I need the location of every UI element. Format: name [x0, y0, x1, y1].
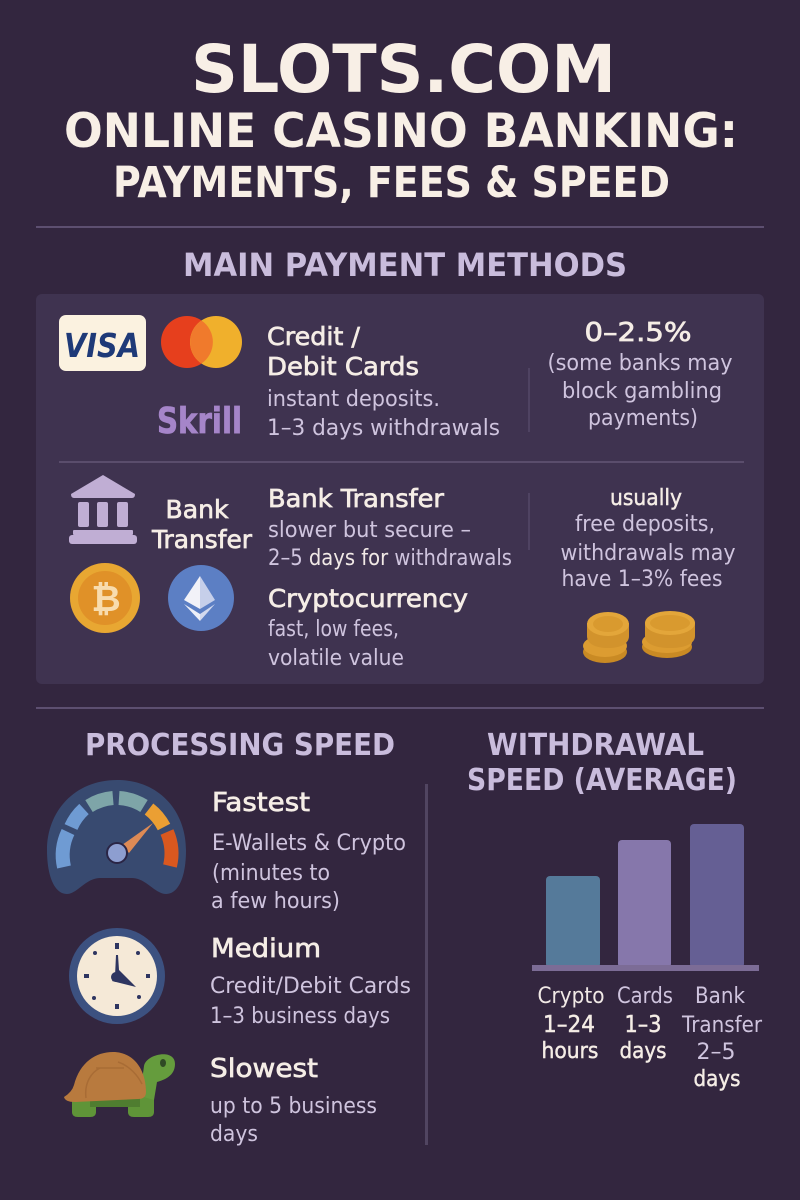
text: credit and debit cards: 1–3 days withdrawals — [267, 416, 500, 441]
icon: coins — [583, 611, 695, 663]
text: fastest — [211, 788, 406, 914]
icon: speedometer — [47, 780, 186, 894]
text: fastest: Fastest — [212, 788, 310, 818]
text: medium: Credit/Debit Cards — [210, 974, 411, 999]
icon: visa: VISA — [64, 326, 140, 365]
text: bank and crypto fees: have 1–3% fees — [562, 567, 722, 592]
heading: withdrawal speed: WITHDRAWAL — [487, 728, 704, 763]
text: slowest: up to 5 business — [210, 1094, 377, 1119]
icon: turtle — [64, 1052, 175, 1117]
bar chart: withdrawal speed — [532, 824, 763, 1092]
icon: skrill: Skrill — [157, 401, 242, 442]
text: bank and crypto fees — [560, 486, 736, 592]
text: slowest: days — [210, 1122, 258, 1147]
text: medium: 1–3 business days — [210, 1004, 390, 1029]
labels: bank transfer: 2–5 — [696, 1040, 736, 1065]
text: cryptocurrency: Cryptocurrency — [268, 584, 468, 613]
title — [64, 31, 738, 208]
icon: mastercard — [161, 316, 242, 368]
heading: main payment methods: MAIN PAYMENT METHODS — [183, 246, 627, 284]
text: bank and crypto fees: withdrawals may — [560, 541, 736, 566]
text: slowest: Slowest — [210, 1054, 318, 1084]
text: fastest: E-Wallets & Crypto — [212, 831, 406, 856]
labels: bank transfer: Bank — [695, 984, 745, 1009]
labels: cards: 1–3 — [624, 1012, 662, 1038]
title: ONLINE CASINO BANKING: — [64, 104, 738, 159]
icon: bitcoin: ₿ — [91, 579, 121, 620]
title: PAYMENTS, FEES & SPEED — [113, 158, 670, 208]
labels: bank transfer: days — [694, 1067, 740, 1092]
icon: bitcoin — [70, 563, 140, 633]
label: bank transfer: Transfer — [151, 525, 253, 554]
bar: bank transfer — [690, 824, 744, 968]
text: card fees: payments) — [588, 406, 698, 431]
title: SLOTS.COM — [191, 31, 616, 108]
label: bank transfer — [151, 495, 253, 554]
text: fastest: a few hours) — [211, 889, 340, 914]
labels: bank transfer — [681, 984, 763, 1092]
labels: cards: days — [620, 1039, 666, 1064]
text: card fees: 0–2.5% — [584, 318, 692, 348]
text: card fees: (some banks may — [548, 351, 732, 376]
panel: main payment methods — [36, 294, 764, 684]
label: bank transfer: Bank — [166, 495, 229, 524]
heading: processing speed: PROCESSING SPEED — [85, 728, 395, 763]
text: cryptocurrency: volatile value — [268, 646, 404, 671]
heading: withdrawal speed: SPEED (AVERAGE) — [467, 763, 737, 798]
heading: withdrawal speed — [467, 728, 737, 798]
icon: bank — [69, 475, 137, 544]
icon: ethereum — [168, 565, 234, 631]
text: medium: Medium — [211, 934, 321, 964]
labels: bank transfer: Transfer — [681, 1013, 763, 1038]
text: bank transfer: Bank Transfer — [268, 484, 445, 513]
icon: clock — [69, 928, 165, 1024]
text: credit and debit cards: instant deposits. — [267, 387, 440, 412]
text: bank and crypto fees: usually — [610, 486, 682, 511]
text: bank transfer — [268, 484, 512, 571]
text: credit and debit cards: Debit Cards — [267, 352, 419, 381]
text: medium — [210, 934, 411, 1029]
labels: crypto: hours — [542, 1039, 598, 1064]
text: slowest — [210, 1054, 377, 1147]
labels: crypto: Crypto — [538, 984, 604, 1009]
labels: cards — [617, 984, 673, 1064]
text: credit and debit cards — [267, 322, 500, 441]
bar: crypto — [546, 876, 600, 968]
text: card fees — [548, 318, 732, 431]
labels: crypto — [538, 984, 604, 1064]
text: cryptocurrency — [268, 584, 468, 671]
text: fastest: (minutes to — [212, 861, 330, 886]
text: bank transfer: 2–5 days for withdrawals — [268, 546, 512, 571]
text: credit and debit cards: Credit / — [267, 322, 361, 351]
icon: visa — [59, 315, 146, 371]
text: bank and crypto fees: free deposits, — [575, 512, 715, 537]
text: bank transfer: slower but secure – — [268, 518, 471, 543]
text: cryptocurrency: fast, low fees, — [268, 617, 399, 642]
labels: cards: Cards — [617, 984, 673, 1009]
text: card fees: block gambling — [562, 379, 722, 404]
bar: cards — [618, 840, 671, 968]
labels: crypto: 1–24 — [543, 1012, 595, 1038]
